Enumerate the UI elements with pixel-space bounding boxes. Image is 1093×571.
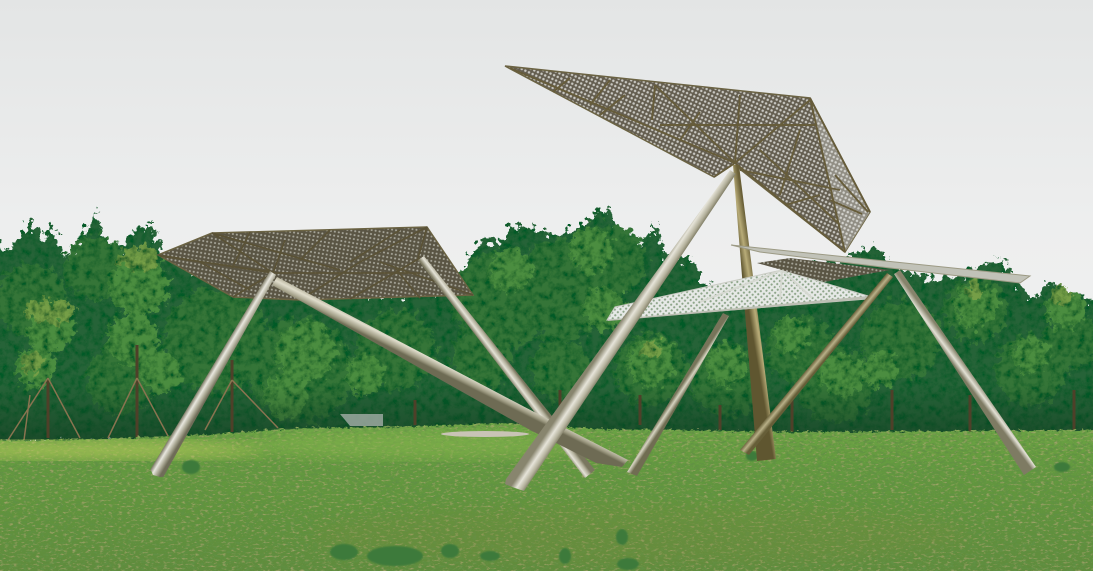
shadow under trees: [0, 385, 1093, 440]
right canopy: [731, 245, 1030, 283]
left pole rear: [418, 256, 595, 478]
dark far forest: [0, 206, 1093, 445]
right sculpture: [731, 245, 1036, 475]
lighter tree crowns: [15, 228, 1085, 417]
central long pole: [505, 170, 736, 491]
central canopy ribs: [510, 68, 870, 252]
rear bronze pole: [733, 165, 776, 461]
pale gravel strip: [441, 431, 529, 437]
left canopy: [158, 227, 473, 300]
right bronze pole: [740, 273, 893, 455]
canopy bright right facet: [812, 102, 870, 252]
mid foliage blobs: [0, 224, 1093, 423]
central sculpture: [505, 66, 870, 491]
left sculpture: [150, 227, 628, 478]
lawn base: [0, 423, 1093, 571]
grass lawn: [0, 423, 1093, 571]
central top canopy: [505, 66, 870, 252]
central short pole: [627, 313, 729, 476]
sky: [0, 0, 1093, 440]
left pole long diagonal: [272, 277, 628, 467]
sunlit lawn patch: [0, 441, 265, 459]
left canopy ribs: [158, 227, 473, 300]
right silver pole: [894, 270, 1036, 475]
lawn dry patch: [310, 505, 970, 565]
water and far path: [340, 414, 383, 426]
tree line background: [0, 206, 1093, 445]
left pole front: [150, 271, 276, 477]
shrubs: [182, 451, 1070, 570]
bright highlights: [22, 246, 1072, 372]
tree trunks and stakes: [8, 345, 1074, 440]
mid lawn light band: [250, 431, 590, 459]
centre mesh triangle: [607, 270, 868, 321]
